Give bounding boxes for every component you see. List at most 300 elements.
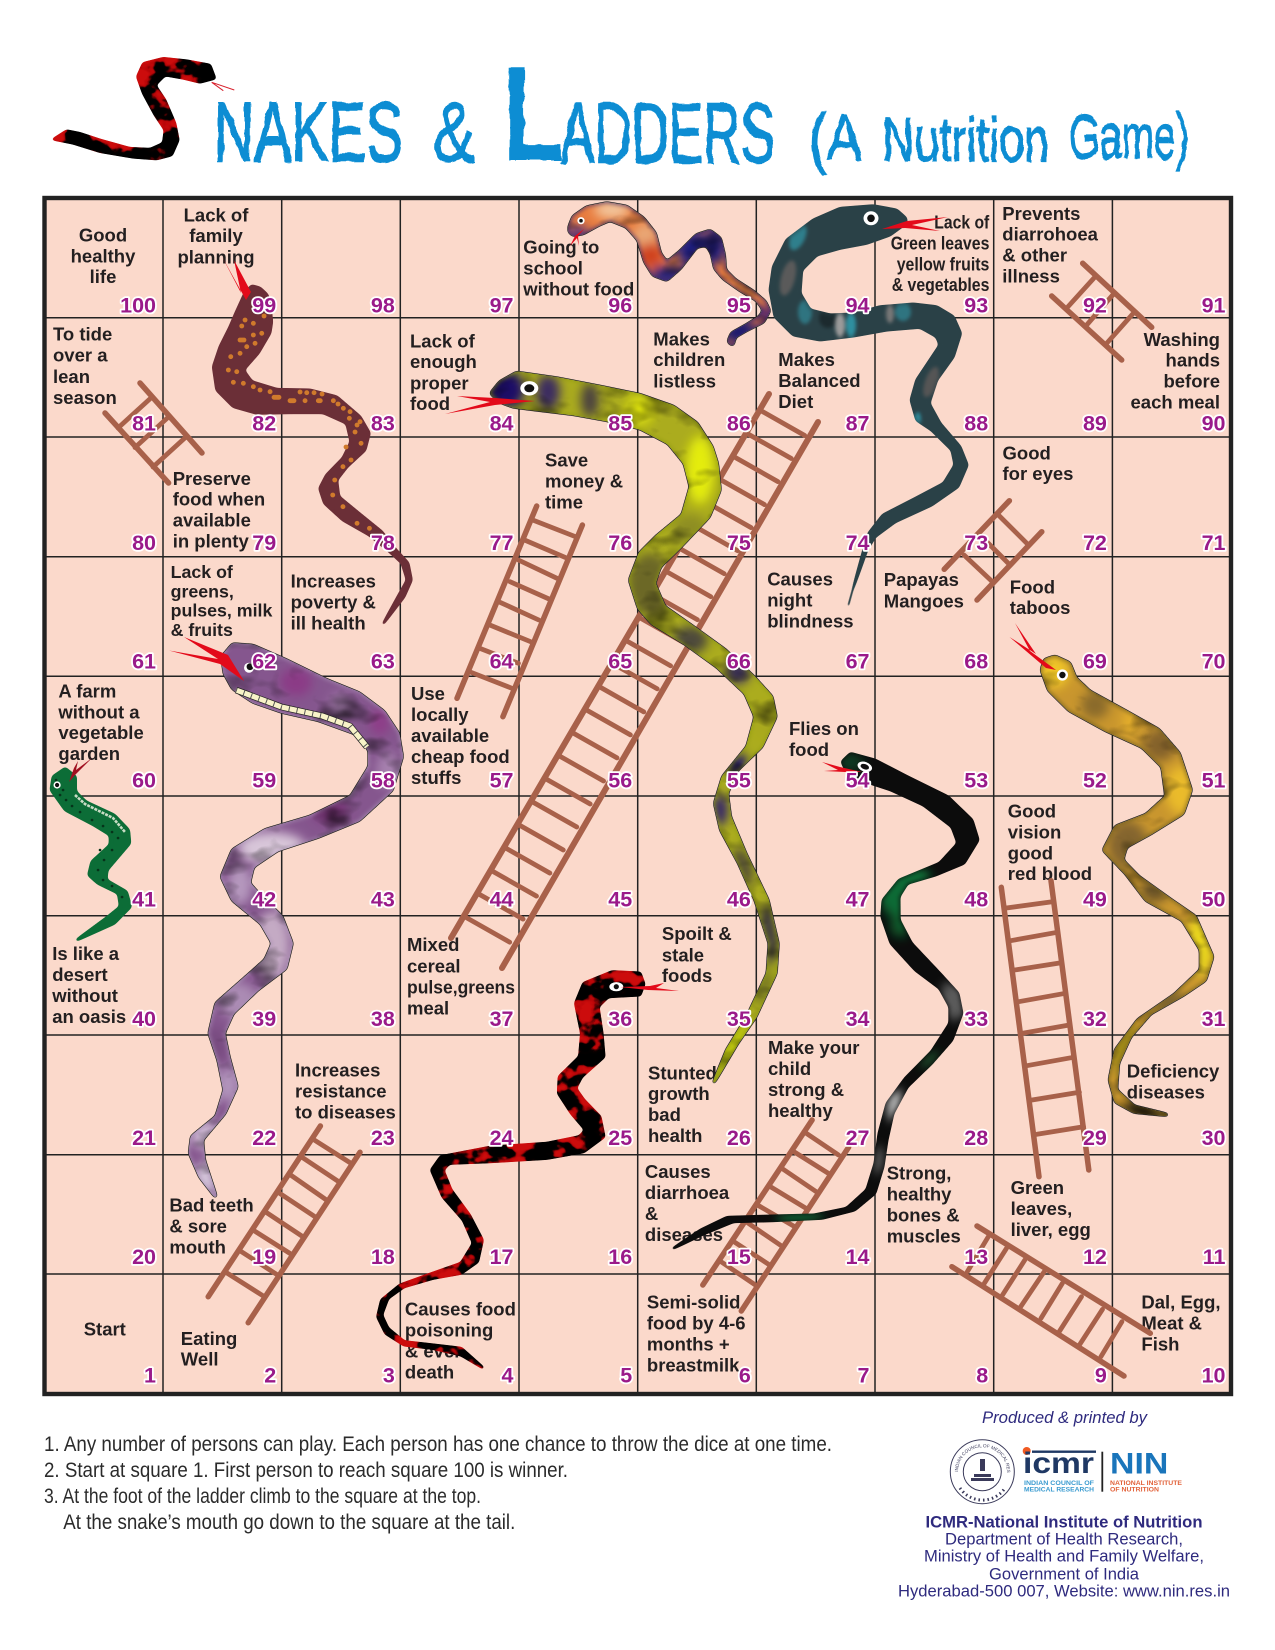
text: green leaves liver egg: Green [1011, 1177, 1064, 1198]
ladder: square 92 [1052, 263, 1152, 360]
text: good healthy life [71, 225, 136, 287]
text: use locally available cheap food stuffs: cheap food [411, 746, 510, 767]
tongue [1010, 623, 1056, 670]
numbers: row 21 to 30: 27 [846, 1126, 870, 1150]
text: dal egg meat and fish: Dal, Egg, [1141, 1291, 1221, 1312]
numbers: row 61 to 70: 69 [1083, 650, 1107, 674]
text: causes food poisoning and even death [405, 1299, 516, 1383]
ladder: 57 to 76 [457, 506, 582, 717]
text: good vision good red blood: red blood [1008, 863, 1092, 884]
tongue [69, 758, 92, 782]
title lettering: L [503, 40, 563, 189]
rules of the game: At the snake’s mouth go down to the square at the tail. [63, 1511, 515, 1534]
text: good vision good red blood: Good [1008, 800, 1056, 821]
numbers: row 61 to 70: 61 [132, 650, 156, 674]
text: good vision good red blood [1008, 800, 1092, 884]
text: use locally available cheap food stuffs [411, 683, 510, 788]
text: deficiency diseases: Deficiency [1127, 1061, 1220, 1082]
numbers: row 60 to 51 [132, 769, 1226, 793]
text: increases resistance to diseases: to diseases [295, 1101, 396, 1122]
text: flies on food: food [789, 739, 829, 760]
text: good healthy life: Good [79, 225, 127, 246]
text: to tide over a lean season: lean [53, 366, 90, 387]
logo: NIN [1110, 1447, 1183, 1494]
logo: icmr: MEDICAL RESEARCH [1024, 1487, 1094, 1494]
text: washing hands before each meal [1131, 329, 1220, 412]
rules of the game [44, 1433, 832, 1534]
numbers: row 40 to 31: 40 [132, 1007, 156, 1031]
numbers: row 81 to 90: 87 [846, 412, 870, 436]
numbers: row 60 to 51: 58 [371, 769, 395, 793]
text: semi-solid food by 4-6 months + breastmilk: months + [647, 1333, 730, 1354]
text: food taboos: Food [1010, 576, 1055, 597]
text: washing hands before each meal: each meal [1131, 391, 1220, 412]
rules of the game: 2. Start at square 1. First person to reach square 100 is winner. [44, 1459, 568, 1482]
text: start: Start [84, 1319, 126, 1340]
text: makes balanced diet: Diet [778, 391, 813, 412]
numbers: row 60 to 51: 59 [252, 769, 276, 793]
text: is like a desert without an oasis: an oasis [52, 1006, 126, 1027]
address block: Department of Health Research, [945, 1530, 1183, 1548]
numbers: row 40 to 31: 34 [846, 1007, 870, 1031]
board cells and grid [44, 198, 1231, 1394]
numbers: row 80 to 71: 78 [371, 531, 395, 555]
numbers: row 1 to 10: 4 [502, 1364, 514, 1388]
numbers: row 21 to 30: 24 [490, 1126, 514, 1150]
numbers: row 100 to 91: 96 [608, 293, 632, 317]
text: causes food poisoning and even death: poisoning [405, 1320, 493, 1341]
belly scales [236, 690, 367, 747]
text: lack of greens pulses milk fruits: & fruits [171, 620, 233, 640]
numbers: row 21 to 30: 25 [608, 1126, 632, 1150]
board panel [44, 198, 1231, 1394]
snake: 84 to 26, yellow and purple [445, 370, 780, 1084]
text: prevents diarrohoea: & other [1002, 245, 1067, 266]
title lettering: Game) [1069, 103, 1189, 172]
text: bad teeth and sore mouth: & sore [169, 1216, 227, 1237]
text: semi-solid food by 4-6 months + breastmilk: food by 4-6 [647, 1312, 746, 1333]
numbers: row 61 to 70: 65 [608, 650, 632, 674]
text: mixed cereal pulse greens meal: cereal [407, 955, 460, 976]
numbers: row 1 to 10 [144, 1364, 1226, 1388]
numbers: row 40 to 31 [132, 1007, 1226, 1031]
numbers: row 100 to 91: 98 [371, 293, 395, 317]
numbers: row 20 to 11: 16 [608, 1245, 632, 1269]
ladder: 68 to 73 [944, 501, 1042, 600]
numbers: row 80 to 71: 79 [252, 531, 276, 555]
text: is like a desert without an oasis [51, 943, 126, 1027]
text: preserve food when available: in plenty [173, 531, 249, 552]
numbers: row 41 to 50: 48 [964, 888, 988, 912]
text: a farm without a vegetable garden: garden [58, 743, 120, 764]
numbers: row 81 to 90: 88 [964, 412, 988, 436]
icon: ICMR seal: INDIAN COUNCIL OF MEDICAL RESEARCH [954, 1444, 1010, 1472]
numbers: row 41 to 50: 42 [252, 888, 276, 912]
text: strong healthy bones and muscles: muscles [887, 1225, 961, 1246]
text: increases resistance to diseases [295, 1060, 396, 1122]
numbers: row 1 to 10: 9 [1095, 1364, 1107, 1388]
text: a farm without a vegetable garden [57, 680, 144, 764]
numbers: row 20 to 11: 11 [1203, 1245, 1226, 1269]
numbers: row 81 to 90: 90 [1202, 412, 1226, 436]
text: save money and time [545, 450, 623, 513]
address block: Government of India [989, 1565, 1140, 1583]
numbers: row 20 to 11: 19 [252, 1245, 276, 1269]
ladder: 6 to 27 [703, 1120, 849, 1311]
numbers: row 40 to 31: 31 [1202, 1007, 1226, 1031]
snake: 62 to 19, purple marbled [169, 637, 402, 1198]
numbers: row 21 to 30: 21 [132, 1126, 156, 1150]
numbers: row 20 to 11: 13 [964, 1245, 988, 1269]
text: use locally available cheap food stuffs: locally [411, 704, 469, 725]
numbers: row 20 to 11: 12 [1083, 1245, 1107, 1269]
numbers: row 41 to 50: 47 [846, 888, 870, 912]
eye [54, 781, 61, 789]
tongue [620, 983, 679, 991]
snake: 69 to 30, golden brown [1010, 623, 1214, 1122]
text: spoilt and stale foods: stale [662, 944, 704, 965]
numbers: row 20 to 11: 17 [490, 1245, 514, 1269]
text: mixed cereal pulse greens meal: meal [407, 997, 449, 1018]
title snake forming the letter S [53, 58, 234, 159]
title lettering: & [433, 85, 475, 179]
numbers: row 41 to 50: 50 [1202, 888, 1226, 912]
text: deficiency diseases: diseases [1127, 1082, 1205, 1103]
numbers: row 81 to 90: 81 [132, 412, 156, 436]
numbers: row 1 to 10: 3 [383, 1364, 395, 1388]
text: strong healthy bones and muscles [887, 1162, 961, 1246]
text: makes children listless: listless [653, 370, 716, 391]
text: mixed cereal pulse greens meal: Mixed [407, 934, 459, 955]
numbers: row 21 to 30: 28 [964, 1126, 988, 1150]
text: causes night blindness: night [767, 589, 812, 610]
ladder: long 37 to 87 [451, 394, 818, 968]
text: lack of family planning: family [189, 225, 243, 246]
text: strong healthy bones and muscles: Strong, [887, 1162, 951, 1183]
text: semi-solid food by 4-6 months + breastmilk: Semi-solid [647, 1291, 740, 1312]
text: a farm without a vegetable garden: A farm [58, 680, 116, 701]
numbers: row 61 to 70: 62 [252, 650, 276, 674]
logo: icmr [1023, 1447, 1096, 1494]
numbers: row 20 to 11 [132, 1245, 1226, 1269]
text: causes night blindness: blindness [767, 610, 854, 631]
numbers: row 40 to 31: 37 [490, 1007, 514, 1031]
numbers: row 20 to 11: 14 [846, 1245, 870, 1269]
text: lack of green leaves: Green leaves [891, 232, 989, 253]
text: good for eyes [1002, 442, 1073, 484]
text: lack of greens pulses milk fruits [171, 562, 273, 640]
text: causes diarrhoea and diseases: & [645, 1203, 658, 1224]
numbers: row 60 to 51: 53 [964, 769, 988, 793]
text: make your child strong and healthy: healthy [768, 1100, 833, 1121]
text: lack of enough proper food: enough [410, 351, 477, 372]
text: make your child strong and healthy [768, 1037, 860, 1121]
numbers: row 40 to 31: 32 [1083, 1007, 1107, 1031]
text: good healthy life: life [90, 266, 116, 287]
text: semi-solid food by 4-6 months + breastmilk: breastmilk [647, 1354, 740, 1375]
text: lack of enough proper food: proper [410, 372, 469, 393]
text: mixed cereal pulse greens meal: pulse,greens [407, 976, 515, 997]
tongue [882, 217, 948, 231]
numbers: row 60 to 51: 52 [1083, 769, 1107, 793]
text: is like a desert without an oasis: without [51, 985, 118, 1006]
text: a farm without a vegetable garden: without a [57, 701, 140, 722]
eye [1057, 669, 1068, 681]
text: papayas mangoes: Papayas [884, 569, 959, 590]
numbers: row 80 to 71: 77 [490, 531, 514, 555]
text: dal egg meat and fish: Fish [1141, 1333, 1179, 1354]
text: makes balanced diet: Balanced [778, 370, 861, 391]
text: good vision good red blood: vision [1008, 821, 1061, 842]
text: washing hands before each meal: Washing [1144, 329, 1220, 350]
numbers: row 100 to 91: 99 [252, 293, 276, 317]
text: bad teeth and sore mouth: Bad teeth [169, 1195, 254, 1216]
numbers: row 21 to 30 [132, 1126, 1226, 1150]
text: good healthy life: healthy [71, 246, 136, 267]
title lettering: ADDERS [560, 86, 775, 182]
text: preserve food when available [173, 468, 265, 552]
ladders [105, 263, 1152, 1376]
tongue [570, 229, 584, 246]
text: makes children listless [653, 328, 725, 391]
numbers: row 60 to 51: 60 [132, 769, 156, 793]
text: increases resistance to diseases: resistance [295, 1081, 387, 1102]
text: is like a desert without an oasis: Is like a [52, 943, 120, 964]
text: strong healthy bones and muscles: healthy [887, 1183, 952, 1204]
text: strong healthy bones and muscles: bones & [887, 1204, 960, 1225]
text: makes balanced diet: Makes [778, 349, 835, 370]
text: save money and time: time [545, 492, 583, 513]
numbers: row 1 to 10: 8 [976, 1364, 988, 1388]
text: dal egg meat and fish: Meat & [1141, 1312, 1202, 1333]
text: green leaves liver egg: leaves, [1011, 1198, 1072, 1219]
numbers: row 81 to 90: 85 [608, 412, 632, 436]
text: preserve food when available: Preserve [173, 468, 251, 489]
logo: icmr: icmr [1023, 1447, 1094, 1480]
numbers: row 1 to 10: 6 [739, 1364, 751, 1388]
numbers: row 41 to 50: 44 [490, 888, 514, 912]
text: green leaves liver egg: liver, egg [1011, 1219, 1091, 1240]
numbers: row 61 to 70 [132, 650, 1226, 674]
numbers: row 81 to 90 [132, 412, 1226, 436]
numbers: row 1 to 10: 10 [1202, 1364, 1226, 1388]
snake: 99 to 63, brown with orange spots [213, 256, 411, 625]
square captions [51, 203, 1221, 1383]
text: increases poverty and ill health: poverty & [291, 591, 376, 612]
numbers: row 41 to 50: 49 [1083, 888, 1107, 912]
text: lack of family planning: planning [177, 246, 255, 267]
numbers: row 40 to 31: 36 [608, 1007, 632, 1031]
title lettering: NAKES [214, 85, 403, 179]
numbers: row 61 to 70: 64 [490, 650, 514, 674]
produced and printed by: Produced & printed by [982, 1409, 1149, 1427]
text: lack of green leaves: Lack of [934, 211, 990, 232]
snake: 36 to 4, red and black [378, 972, 679, 1368]
text: make your child strong and healthy: strong & [768, 1079, 844, 1100]
numbers: row 40 to 31: 35 [727, 1007, 751, 1031]
numbers: row 21 to 30: 26 [727, 1126, 751, 1150]
numbers: row 61 to 70: 67 [846, 650, 870, 674]
numbers: row 80 to 71: 80 [132, 531, 156, 555]
text: use locally available cheap food stuffs: stuffs [411, 767, 461, 788]
numbers: row 80 to 71: 75 [727, 531, 751, 555]
address block: Hyderabad-500 007, Website: www.nin.res.in [898, 1583, 1230, 1601]
numbers: row 61 to 70: 63 [371, 650, 395, 674]
text: to tide over a lean season: To tide [53, 324, 112, 345]
text: prevents diarrohoea [1002, 203, 1099, 287]
rules of the game: 1. Any number of persons can play. Each person has one chance to throw the dice at one time. [44, 1433, 832, 1456]
tongue [822, 762, 862, 772]
logo: icmr: INDIAN COUNCIL OF [1024, 1480, 1094, 1487]
text: increases poverty and ill health [291, 571, 376, 633]
text: bad teeth and sore mouth: mouth [169, 1237, 226, 1258]
numbers: row 100 to 91 [120, 293, 1226, 317]
tongue [222, 256, 251, 300]
numbers: row 80 to 71: 76 [608, 531, 632, 555]
numbers: row 60 to 51: 56 [608, 769, 632, 793]
text: flies on food: Flies on [789, 718, 859, 739]
text: make your child strong and healthy: child [768, 1058, 811, 1079]
title lettering: (A [809, 100, 862, 174]
eye [609, 982, 623, 991]
text: stunted growth bad health: bad [648, 1104, 681, 1125]
numbers: row 60 to 51: 57 [490, 769, 514, 793]
text: causes food poisoning and even death: Causes food [405, 1299, 516, 1320]
text: dal egg meat and fish [1141, 1291, 1221, 1354]
numbers: row 1 to 10: 7 [858, 1364, 870, 1388]
logo: NIN: OF NUTRITION [1110, 1487, 1159, 1494]
text: lack of enough proper food: food [410, 393, 450, 414]
text: going to school without food: without food [522, 278, 634, 299]
text: lack of greens pulses milk fruits: Lack of [171, 562, 233, 582]
numbers: row 60 to 51: 55 [727, 769, 751, 793]
text: papayas mangoes: Mangoes [884, 590, 964, 611]
numbers: row 40 to 31: 33 [964, 1007, 988, 1031]
text: deficiency diseases [1127, 1061, 1220, 1103]
snakes [51, 202, 1214, 1368]
eye [244, 663, 254, 673]
text: stunted growth bad health: growth [648, 1083, 710, 1104]
text: lack of greens pulses milk fruits: pulses, milk [171, 601, 273, 621]
eye [864, 211, 878, 225]
logo: NIN: NIN [1110, 1447, 1168, 1480]
numbers: row 20 to 11: 18 [371, 1245, 395, 1269]
text: prevents diarrohoea: Prevents [1002, 203, 1080, 224]
text: washing hands before each meal: before [1163, 371, 1220, 392]
text: causes food poisoning and even death: & even [405, 1341, 466, 1362]
ladder: 12 to 49 [1001, 881, 1089, 1177]
text: good vision good red blood: good [1008, 842, 1053, 863]
text: increases poverty and ill health: Increases [291, 571, 376, 592]
ladder: square 81 [105, 383, 202, 483]
text: lack of family planning [177, 205, 255, 267]
text: lack of green leaves: yellow fruits [897, 253, 989, 274]
text: preserve food when available: food when [173, 489, 265, 510]
tongue [169, 637, 244, 681]
text: makes children listless: children [653, 349, 725, 370]
numbers: row 81 to 90: 86 [727, 412, 751, 436]
numbers: row 20 to 11: 15 [727, 1245, 751, 1269]
numbers: row 40 to 31: 39 [252, 1007, 276, 1031]
numbers: row 61 to 70: 68 [964, 650, 988, 674]
numbers: row 21 to 30: 29 [1083, 1126, 1107, 1150]
logo: divider [1101, 1452, 1103, 1492]
snake: 54 to 15, black green and grey [672, 752, 978, 1249]
numbers: row 21 to 30: 23 [371, 1126, 395, 1150]
numbers: row 21 to 30: 22 [252, 1126, 276, 1150]
text: lack of green leaves [891, 211, 990, 295]
text: good for eyes: Good [1002, 442, 1051, 463]
text: causes diarrhoea and diseases: diarrhoea [645, 1182, 730, 1203]
title lettering [214, 40, 1189, 189]
text: washing hands before each meal: hands [1166, 350, 1220, 371]
text: to tide over a lean season: over a [53, 345, 108, 366]
numbers: row 80 to 71: 72 [1083, 531, 1107, 555]
eye [520, 381, 538, 395]
numbers: row 80 to 71: 71 [1202, 531, 1226, 555]
numbers: row 81 to 90: 84 [490, 412, 514, 436]
text: spoilt and stale foods: foods [662, 965, 712, 986]
numbers: row 41 to 50: 43 [371, 888, 395, 912]
tongue [445, 396, 535, 414]
address block: ICMR-National Institute of Nutrition [926, 1513, 1202, 1531]
text: prevents diarrohoea: illness [1002, 266, 1060, 287]
snake: 94 to 67, dark teal [770, 206, 971, 607]
numbers: row 81 to 90: 83 [371, 412, 395, 436]
text: lack of green leaves: & vegetables [892, 274, 989, 295]
text: eating well: Eating [181, 1328, 237, 1349]
square numbers [120, 293, 1226, 1388]
text: semi-solid food by 4-6 months + breastmilk [647, 1291, 746, 1375]
snake: 96 to 86, orange and navy [565, 202, 775, 345]
numbers: row 1 to 10: 1 [144, 1364, 156, 1388]
rules of the game: 3. At the foot of the ladder climb to the square at the top. [44, 1485, 481, 1508]
address block [898, 1513, 1230, 1601]
numbers: row 100 to 91: 93 [964, 293, 988, 317]
text: lack of greens pulses milk fruits: greens, [171, 581, 234, 601]
numbers: row 100 to 91: 97 [490, 293, 514, 317]
text: lack of enough proper food: Lack of [410, 330, 476, 351]
text: going to school without food: school [523, 257, 583, 278]
text: causes food poisoning and even death: death [405, 1362, 454, 1383]
logo: NIN: NATIONAL INSTITUTE [1110, 1480, 1183, 1487]
text: save money and time: money & [545, 471, 623, 492]
numbers: row 41 to 50 [132, 888, 1226, 912]
icon: ICMR seal [950, 1439, 1015, 1504]
text: lack of enough proper food [410, 330, 477, 414]
text: food taboos: taboos [1010, 597, 1070, 618]
title lettering: Nutrition [882, 106, 1049, 175]
text: going to school without food: Going to [523, 236, 599, 257]
text: eating well: Well [181, 1349, 219, 1370]
numbers: row 41 to 50: 41 [132, 888, 156, 912]
numbers: row 61 to 70: 66 [727, 650, 751, 674]
numbers: row 41 to 50: 45 [608, 888, 632, 912]
text: increases resistance to diseases: Increases [295, 1060, 380, 1081]
text: causes night blindness [767, 568, 854, 631]
text: increases poverty and ill health: ill health [291, 612, 366, 633]
text: make your child strong and healthy: Make your [768, 1037, 860, 1058]
text: good for eyes: for eyes [1002, 463, 1073, 484]
text: stunted growth bad health [648, 1062, 717, 1146]
ladder: 2 to 23 [208, 1126, 360, 1323]
text: mixed cereal pulse greens meal [407, 934, 515, 1018]
title [53, 40, 1189, 189]
numbers: row 21 to 30: 30 [1202, 1126, 1226, 1150]
eye [856, 760, 873, 774]
address block: Ministry of Health and Family Welfare, [924, 1548, 1204, 1566]
text: preserve food when available: available [173, 510, 251, 531]
